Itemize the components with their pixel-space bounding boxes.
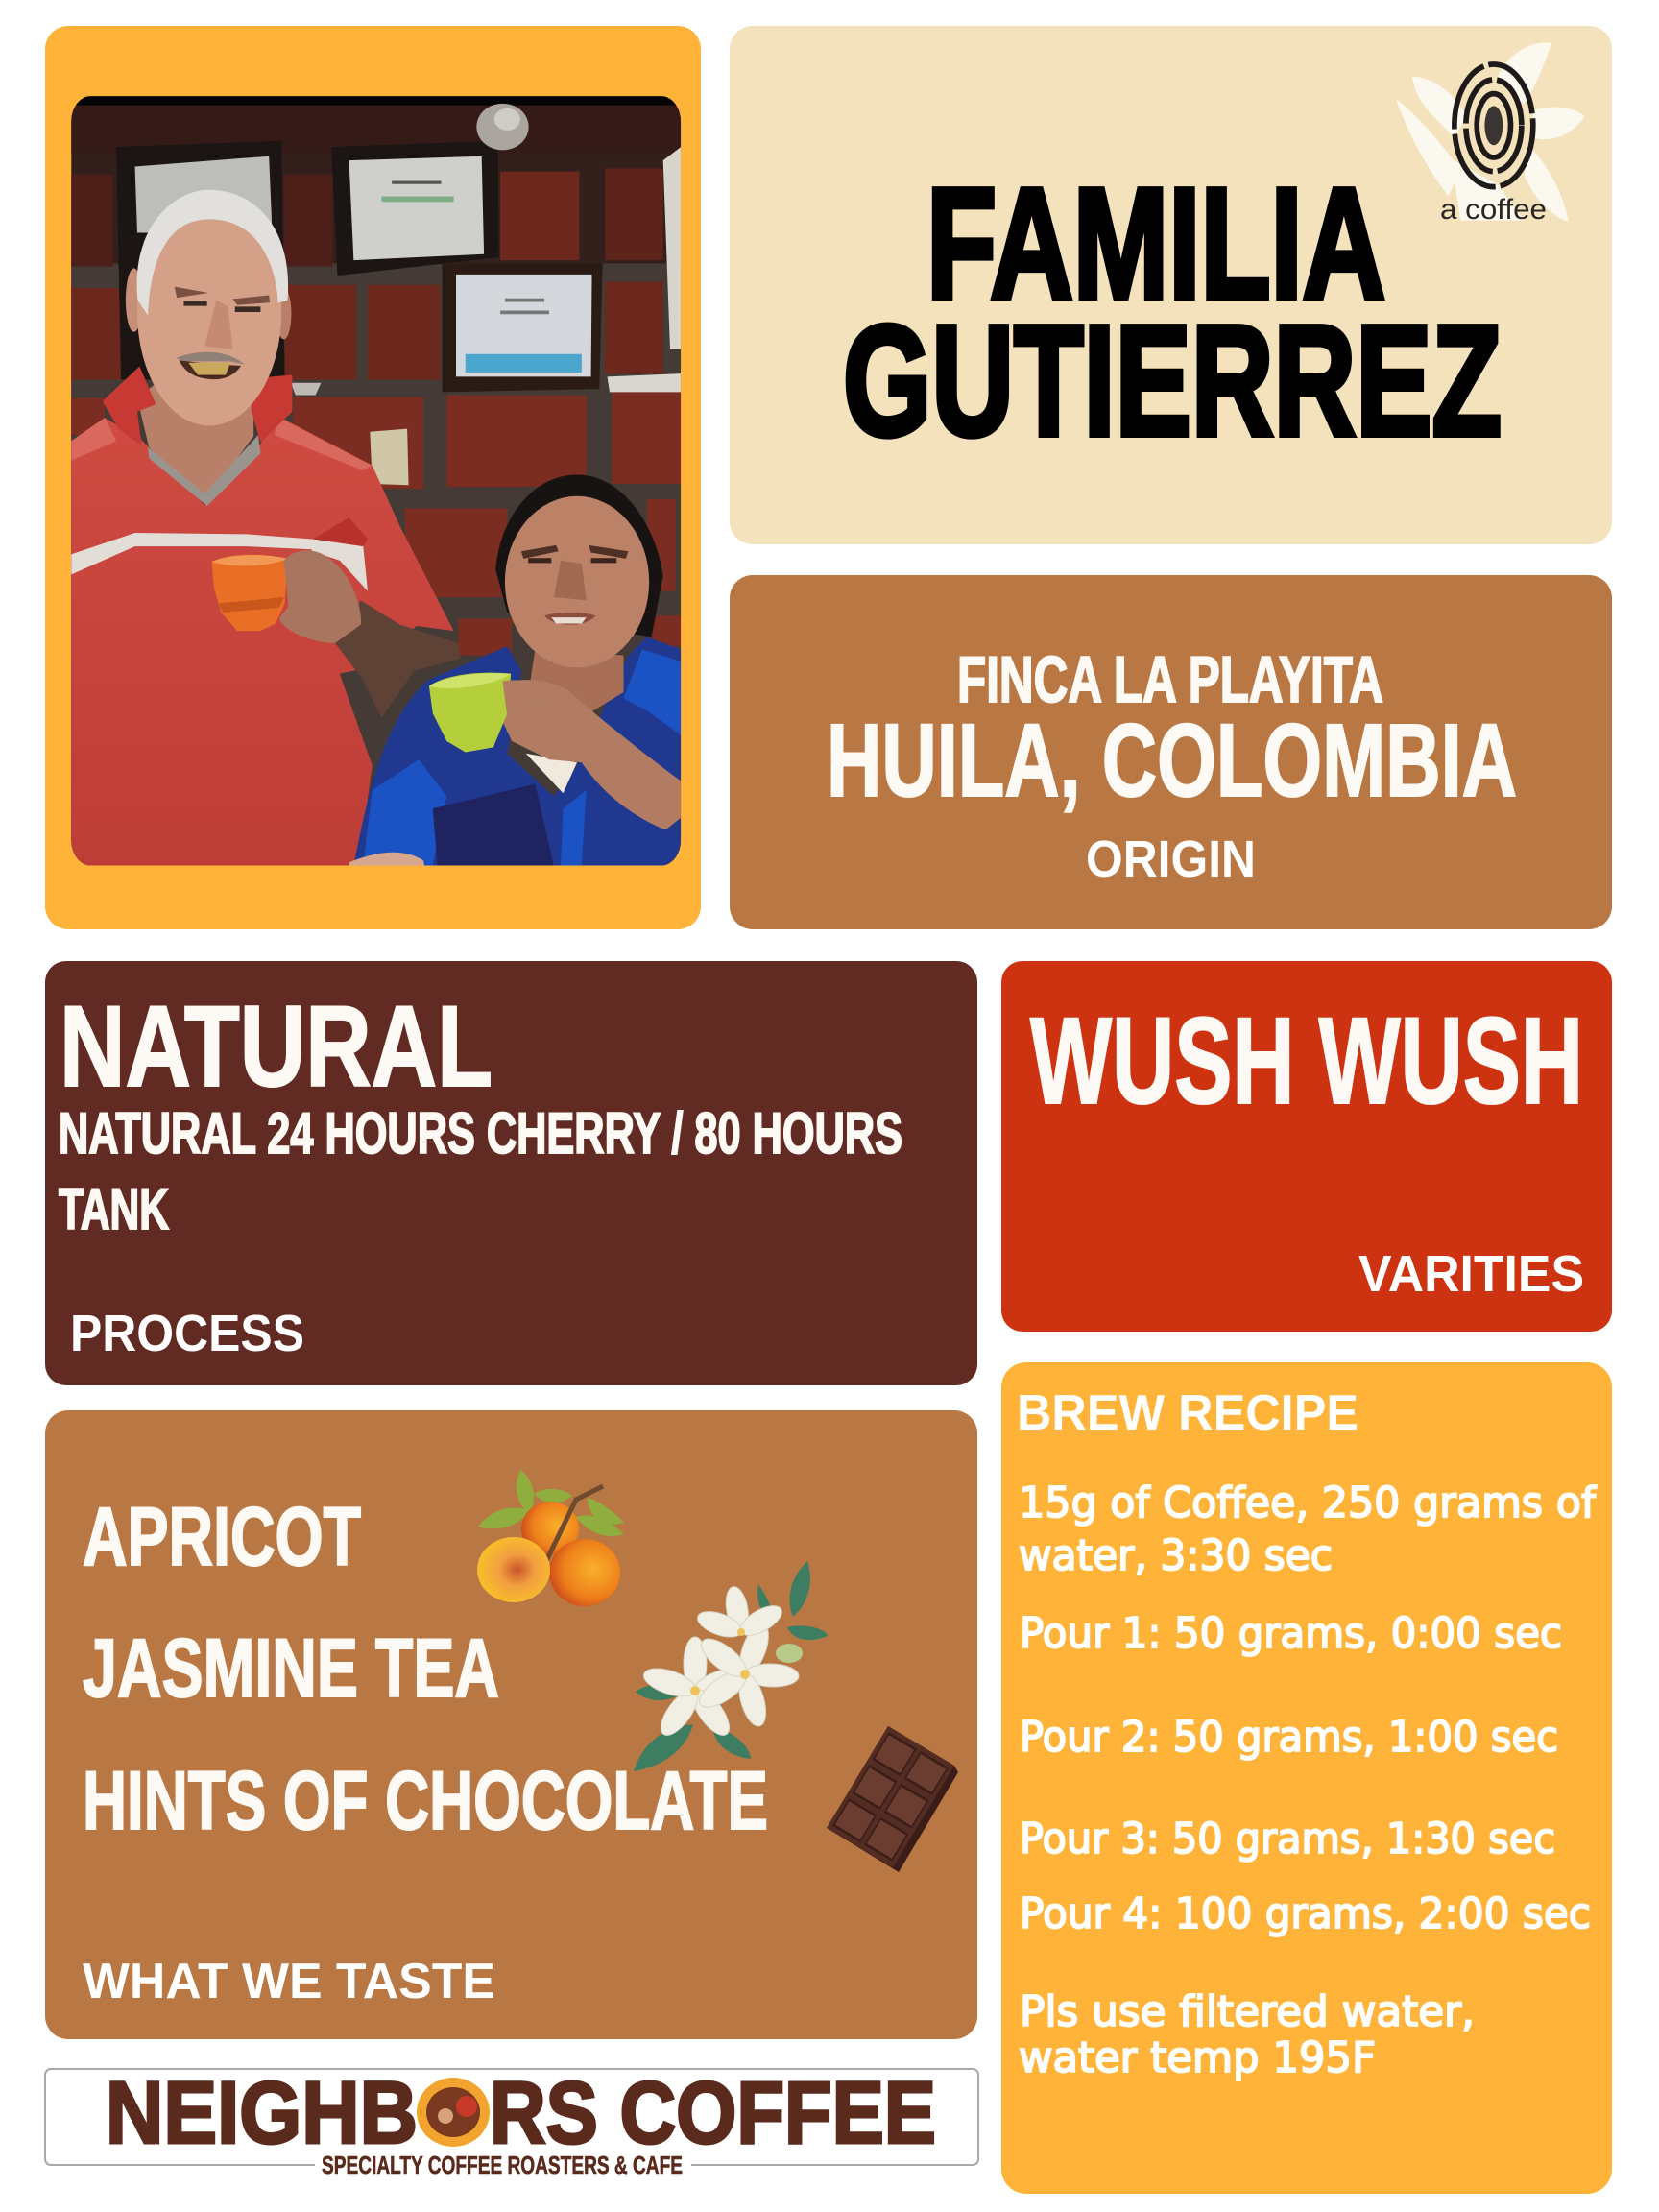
label: varieties: VARITIES [1358, 1245, 1584, 1303]
certificates on wall [116, 104, 681, 485]
note: jasmine tea: JASMINE TEA [83, 1623, 499, 1715]
panel: process [45, 961, 977, 1385]
label: origin: ORIGIN [1086, 830, 1256, 888]
panel: tasting notes [45, 1410, 977, 2039]
panel: photo [45, 26, 701, 929]
logo: Neighbors Coffee: SPECIALTY COFFEE ROASTERS & CAFE [322, 2151, 683, 2179]
heading: family name [843, 156, 1502, 469]
woman [349, 474, 681, 865]
icon: apricots [477, 1470, 624, 1606]
photo: farmers holding cups [71, 96, 681, 865]
recipe steps: water, 3:30 sec [1019, 1531, 1333, 1580]
process detail: NATURAL 24 HOURS CHERRY / 80 HOURS [59, 1101, 902, 1166]
note: apricot: APRICOT [83, 1491, 361, 1583]
recipe steps: Pour 1: 50 grams, 0:00 sec [1020, 1609, 1562, 1658]
logo: Neighbors Coffee [45, 2064, 978, 2179]
label: process: PROCESS [70, 1305, 304, 1362]
heading: family name: FAMILIA [926, 156, 1385, 331]
icon: mascot in O [417, 2078, 490, 2147]
logo: Neighbors Coffee: RS COFFEE [490, 2064, 936, 2162]
process detail [59, 1101, 902, 1241]
process detail: TANK [59, 1177, 169, 1241]
recipe steps: Pour 4: 100 grams, 2:00 sec [1020, 1889, 1591, 1938]
process heading: NATURAL [60, 982, 493, 1111]
orange cup [212, 555, 288, 631]
recipe steps: 15g of Coffee, 250 grams of [1019, 1479, 1597, 1527]
man's hand and arm [335, 600, 461, 718]
logo: Neighbors Coffee: NEIGHB [106, 2064, 418, 2162]
recipe steps [1019, 1479, 1597, 2082]
icon: a coffee logo: a coffee [1440, 194, 1547, 226]
panel: brew recipe [1001, 1362, 1612, 2194]
recipe heading: BREW RECIPE [1017, 1385, 1358, 1441]
recipe steps: Pour 2: 50 grams, 1:00 sec [1020, 1713, 1558, 1762]
green cup [428, 672, 518, 753]
man [71, 190, 461, 865]
label: what we taste: WHAT WE TASTE [83, 1954, 495, 2009]
woman's hand and arm [500, 680, 681, 830]
icon: a coffee logo [1396, 42, 1584, 226]
icon: chocolate bar [827, 1726, 958, 1872]
recipe steps: water temp 195F [1019, 2033, 1376, 2082]
panel: varieties [1001, 961, 1612, 1332]
recipe steps: Pls use filtered water, [1020, 1987, 1475, 2036]
farm name: FINCA LA PLAYITA [957, 643, 1383, 716]
panel: origin [730, 575, 1612, 929]
icon: jasmine flowers [634, 1561, 828, 1771]
recipe steps: Pour 3: 50 grams, 1:30 sec [1020, 1815, 1555, 1863]
note: hints of chocolate: HINTS OF CHOCOLATE [83, 1755, 768, 1847]
panel: title [730, 26, 1612, 544]
